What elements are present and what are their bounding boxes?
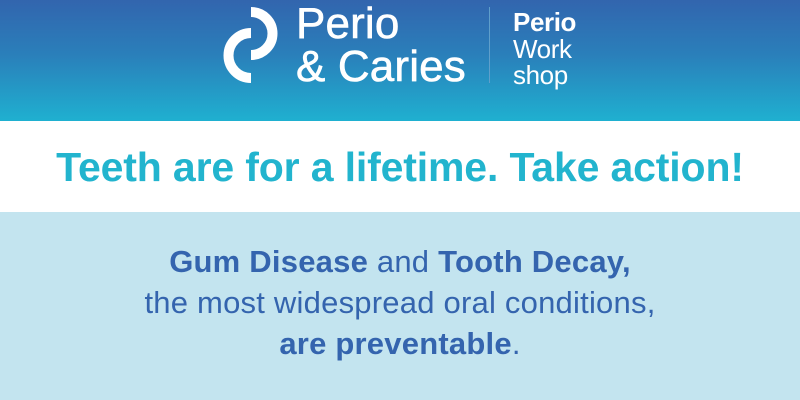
message text: Gum Disease and Tooth Decay,: [169, 244, 631, 279]
message text: the most widespread oral conditions,: [144, 285, 656, 320]
message panel: [0, 212, 800, 400]
white slogan band: [0, 121, 800, 212]
header band: [0, 0, 800, 121]
logo text: Perio & Caries: [296, 0, 466, 90]
icon: Perio & Caries logo mark: [224, 7, 278, 83]
logo text: Perio Workshop: Perio: [513, 7, 576, 37]
logo text: Perio & Caries: & Caries: [296, 42, 466, 90]
vertical divider: [489, 7, 490, 83]
logo text: Perio Workshop: Work: [513, 34, 572, 64]
message text: are preventable.: [279, 326, 521, 361]
logo text: Perio & Caries: Perio: [296, 0, 399, 48]
logo text: Perio Workshop: [513, 7, 576, 90]
slogan heading: Teeth are for a lifetime. Take action!: [56, 144, 744, 190]
logo text: Perio Workshop: shop: [513, 60, 568, 90]
message text: [144, 244, 656, 361]
